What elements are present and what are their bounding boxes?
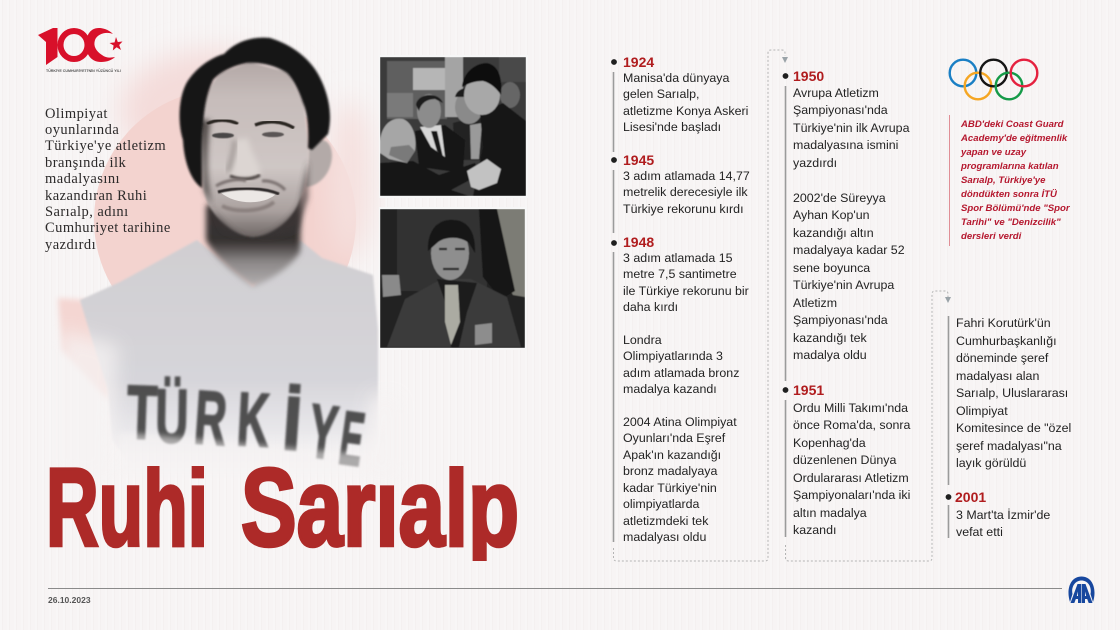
entry final honours: şeref madalyası"na: [956, 438, 1062, 452]
entry 1950: 2002'de Süreyya: [793, 190, 886, 204]
intro text: madalyasını: [45, 171, 120, 187]
intro text: oyunlarında: [45, 122, 119, 138]
hair: [180, 38, 330, 188]
entry 1951: Ordu Milli Takımı'nda: [793, 400, 908, 414]
red side note: Spor Bölümü'nde "Spor: [961, 203, 1070, 214]
entry 1924: Manisa'da dünyaya: [623, 71, 729, 85]
entry 1950: madalyasına ismini: [793, 138, 898, 152]
neck: [206, 195, 301, 287]
entry 1948: madalya kazandı: [623, 382, 717, 396]
entry 1948: Londra: [623, 333, 662, 347]
red side note: döndükten sonra İTÜ: [961, 189, 1057, 200]
timeline column 3: [955, 316, 1071, 539]
entry 1948: ile Türkiye rekorunu bir: [623, 284, 749, 298]
name title: [50, 466, 517, 561]
entry final honours: [956, 316, 1071, 470]
entry 1951: önce Roma'da, sonra: [793, 418, 910, 432]
entry final honours: madalyası alan: [956, 368, 1039, 382]
photo: medal ceremony: [380, 57, 526, 198]
year 1951: 1951: [793, 382, 824, 398]
shirt lettering: K: [235, 378, 271, 464]
entry 1945: 3 adım atlamada 14,77: [623, 169, 750, 183]
entry 1948: madalyası oldu: [623, 530, 706, 544]
entry 1950: Atletizm: [793, 296, 837, 310]
red side note: programlarına katılan: [961, 161, 1059, 172]
100th anniversary logo: [38, 28, 122, 72]
intro text: Sarıalp, adını: [45, 204, 129, 220]
red side note: [949, 115, 1069, 246]
shirt lettering: Ü: [155, 374, 189, 460]
entry 1945: [623, 169, 750, 216]
year 1950: 1950: [793, 68, 824, 84]
name title: Ruhi: [46, 446, 208, 570]
entry 1948: 2004 Atina Olimpiyat: [623, 415, 737, 429]
red side note: yapan ve uzay: [961, 147, 1026, 158]
entry 1950: Şampiyonası'nda: [793, 103, 888, 117]
entry 1948: 3 adım atlamada 15: [623, 251, 733, 265]
entry 2001: 3 Mart'ta İzmir'de: [956, 508, 1050, 522]
entry 1950: madalya oldu: [793, 348, 867, 362]
intro text: yazdırdı: [45, 237, 96, 253]
face: [200, 62, 309, 238]
entry 1948: Apak'ın kazandığı: [623, 448, 721, 462]
name title: Sarıalp: [241, 446, 519, 570]
entry 1950: Şampiyonası'nda: [793, 313, 888, 327]
footer rule: [48, 588, 1062, 589]
shirt: [60, 240, 400, 480]
red side note: dersleri verdi: [961, 231, 1021, 242]
entry 1950: [793, 86, 910, 362]
entry 1950: Türkiye'nin Avrupa: [793, 278, 894, 292]
entry final honours: Cumhurbaşkanlığı: [956, 334, 1057, 348]
intro text: branşında ilk: [45, 155, 126, 171]
ear right: [306, 140, 332, 187]
entry 1951: altın madalya: [793, 506, 867, 520]
timeline column 2: [793, 68, 910, 537]
red side note: ABD'deki Coast Guard: [961, 119, 1064, 130]
entry 1948: adım atlamada bronz: [623, 366, 739, 380]
entry final honours: Olimpiyat: [956, 404, 1008, 418]
entry 1948: kadar Türkiye'nin: [623, 481, 717, 495]
shirt lettering: [125, 369, 369, 483]
entry 1924: Lisesi'nde başladı: [623, 120, 721, 134]
entry 1950: yazdırdı: [793, 156, 837, 170]
entry 2001: vefat etti: [956, 525, 1003, 539]
entry 1924: gelen Sarıalp,: [623, 87, 699, 101]
red side note: Academy'de eğitmenlik: [961, 133, 1067, 144]
entry 1948: olimpiyatlarda: [623, 497, 699, 511]
entry 1951: Şampiyonaları'nda iki: [793, 488, 910, 502]
entry 1948: atletizmdeki tek: [623, 514, 708, 528]
red side note: Tarihi" ve "Denizcilik": [961, 217, 1061, 228]
entry 1945: Türkiye rekorunu kırdı: [623, 202, 744, 216]
entry 1951: kazandı: [793, 523, 836, 537]
intro text: kazandıran Ruhi: [45, 188, 147, 204]
date: 26.10.2023: [48, 595, 91, 605]
entry 1948: Oyunları'nda Eşref: [623, 431, 725, 445]
entry 1950: kazandığı tek: [793, 330, 867, 344]
entry 1948: [623, 251, 749, 544]
red side note: Sarıalp, Türkiye'ye: [961, 175, 1045, 186]
shirt lettering: R: [192, 376, 229, 462]
intro text: Cumhuriyet tarihine: [45, 220, 171, 236]
entry final honours: Komitesince de "özel: [956, 421, 1071, 435]
entry final honours: döneminde şeref: [956, 351, 1048, 365]
entry 1950: madalyaya kadar 52: [793, 243, 905, 257]
entry 1951: Kopenhag'da: [793, 436, 866, 450]
entry 1948: Olimpiyatlarında 3: [623, 349, 723, 363]
entry final honours: layık görüldü: [956, 456, 1026, 470]
entry final honours: Sarıalp, Uluslararası: [956, 386, 1068, 400]
year 2001: 2001: [955, 489, 986, 505]
entry 1951: Ordulararası Atletizm: [793, 470, 909, 484]
entry 1950: kazandığı altın: [793, 226, 874, 240]
timeline column 1: [623, 54, 750, 544]
year 1945: 1945: [623, 152, 654, 168]
shirt lettering: İ: [280, 382, 305, 467]
entry final honours: Fahri Korutürk'ün: [956, 316, 1051, 330]
shirt lettering: E: [335, 397, 369, 483]
shirt lettering: Y: [304, 387, 342, 475]
entry 1950: Türkiye'nin ilk Avrupa: [793, 120, 909, 134]
AA logo: [1068, 576, 1094, 603]
entry 2001: [956, 508, 1050, 539]
entry 1950: Avrupa Atletizm: [793, 86, 879, 100]
intro text: [45, 106, 171, 253]
entry 1924: atletizme Konya Askeri: [623, 104, 748, 118]
intro text: Türkiye'ye atletizm: [45, 138, 166, 154]
entry 1951: [793, 400, 910, 537]
intro text: Olimpiyat: [45, 106, 108, 122]
100th anniversary logo: TÜRKİYE CUMHURİYETİ'NİN YÜZÜNCÜ YILI: [46, 68, 121, 72]
entry 1950: sene boyunca: [793, 260, 870, 274]
entry 1948: bronz madalyaya: [623, 464, 717, 478]
entry 1948: daha kırdı: [623, 300, 678, 314]
pink flag backdrop: [58, 50, 372, 400]
year 1948: 1948: [623, 234, 654, 250]
entry 1950: Ayhan Kop'un: [793, 208, 870, 222]
photo: portrait in blazer: [380, 207, 525, 348]
shirt lettering: T: [125, 369, 159, 456]
entry 1951: düzenlenen Dünya: [793, 453, 896, 467]
entry 1948: metre 7,5 santimetre: [623, 267, 737, 281]
entry 1924: [623, 71, 748, 134]
entry 1945: metrelik derecesiyle ilk: [623, 185, 748, 199]
year 1924: 1924: [623, 54, 654, 70]
